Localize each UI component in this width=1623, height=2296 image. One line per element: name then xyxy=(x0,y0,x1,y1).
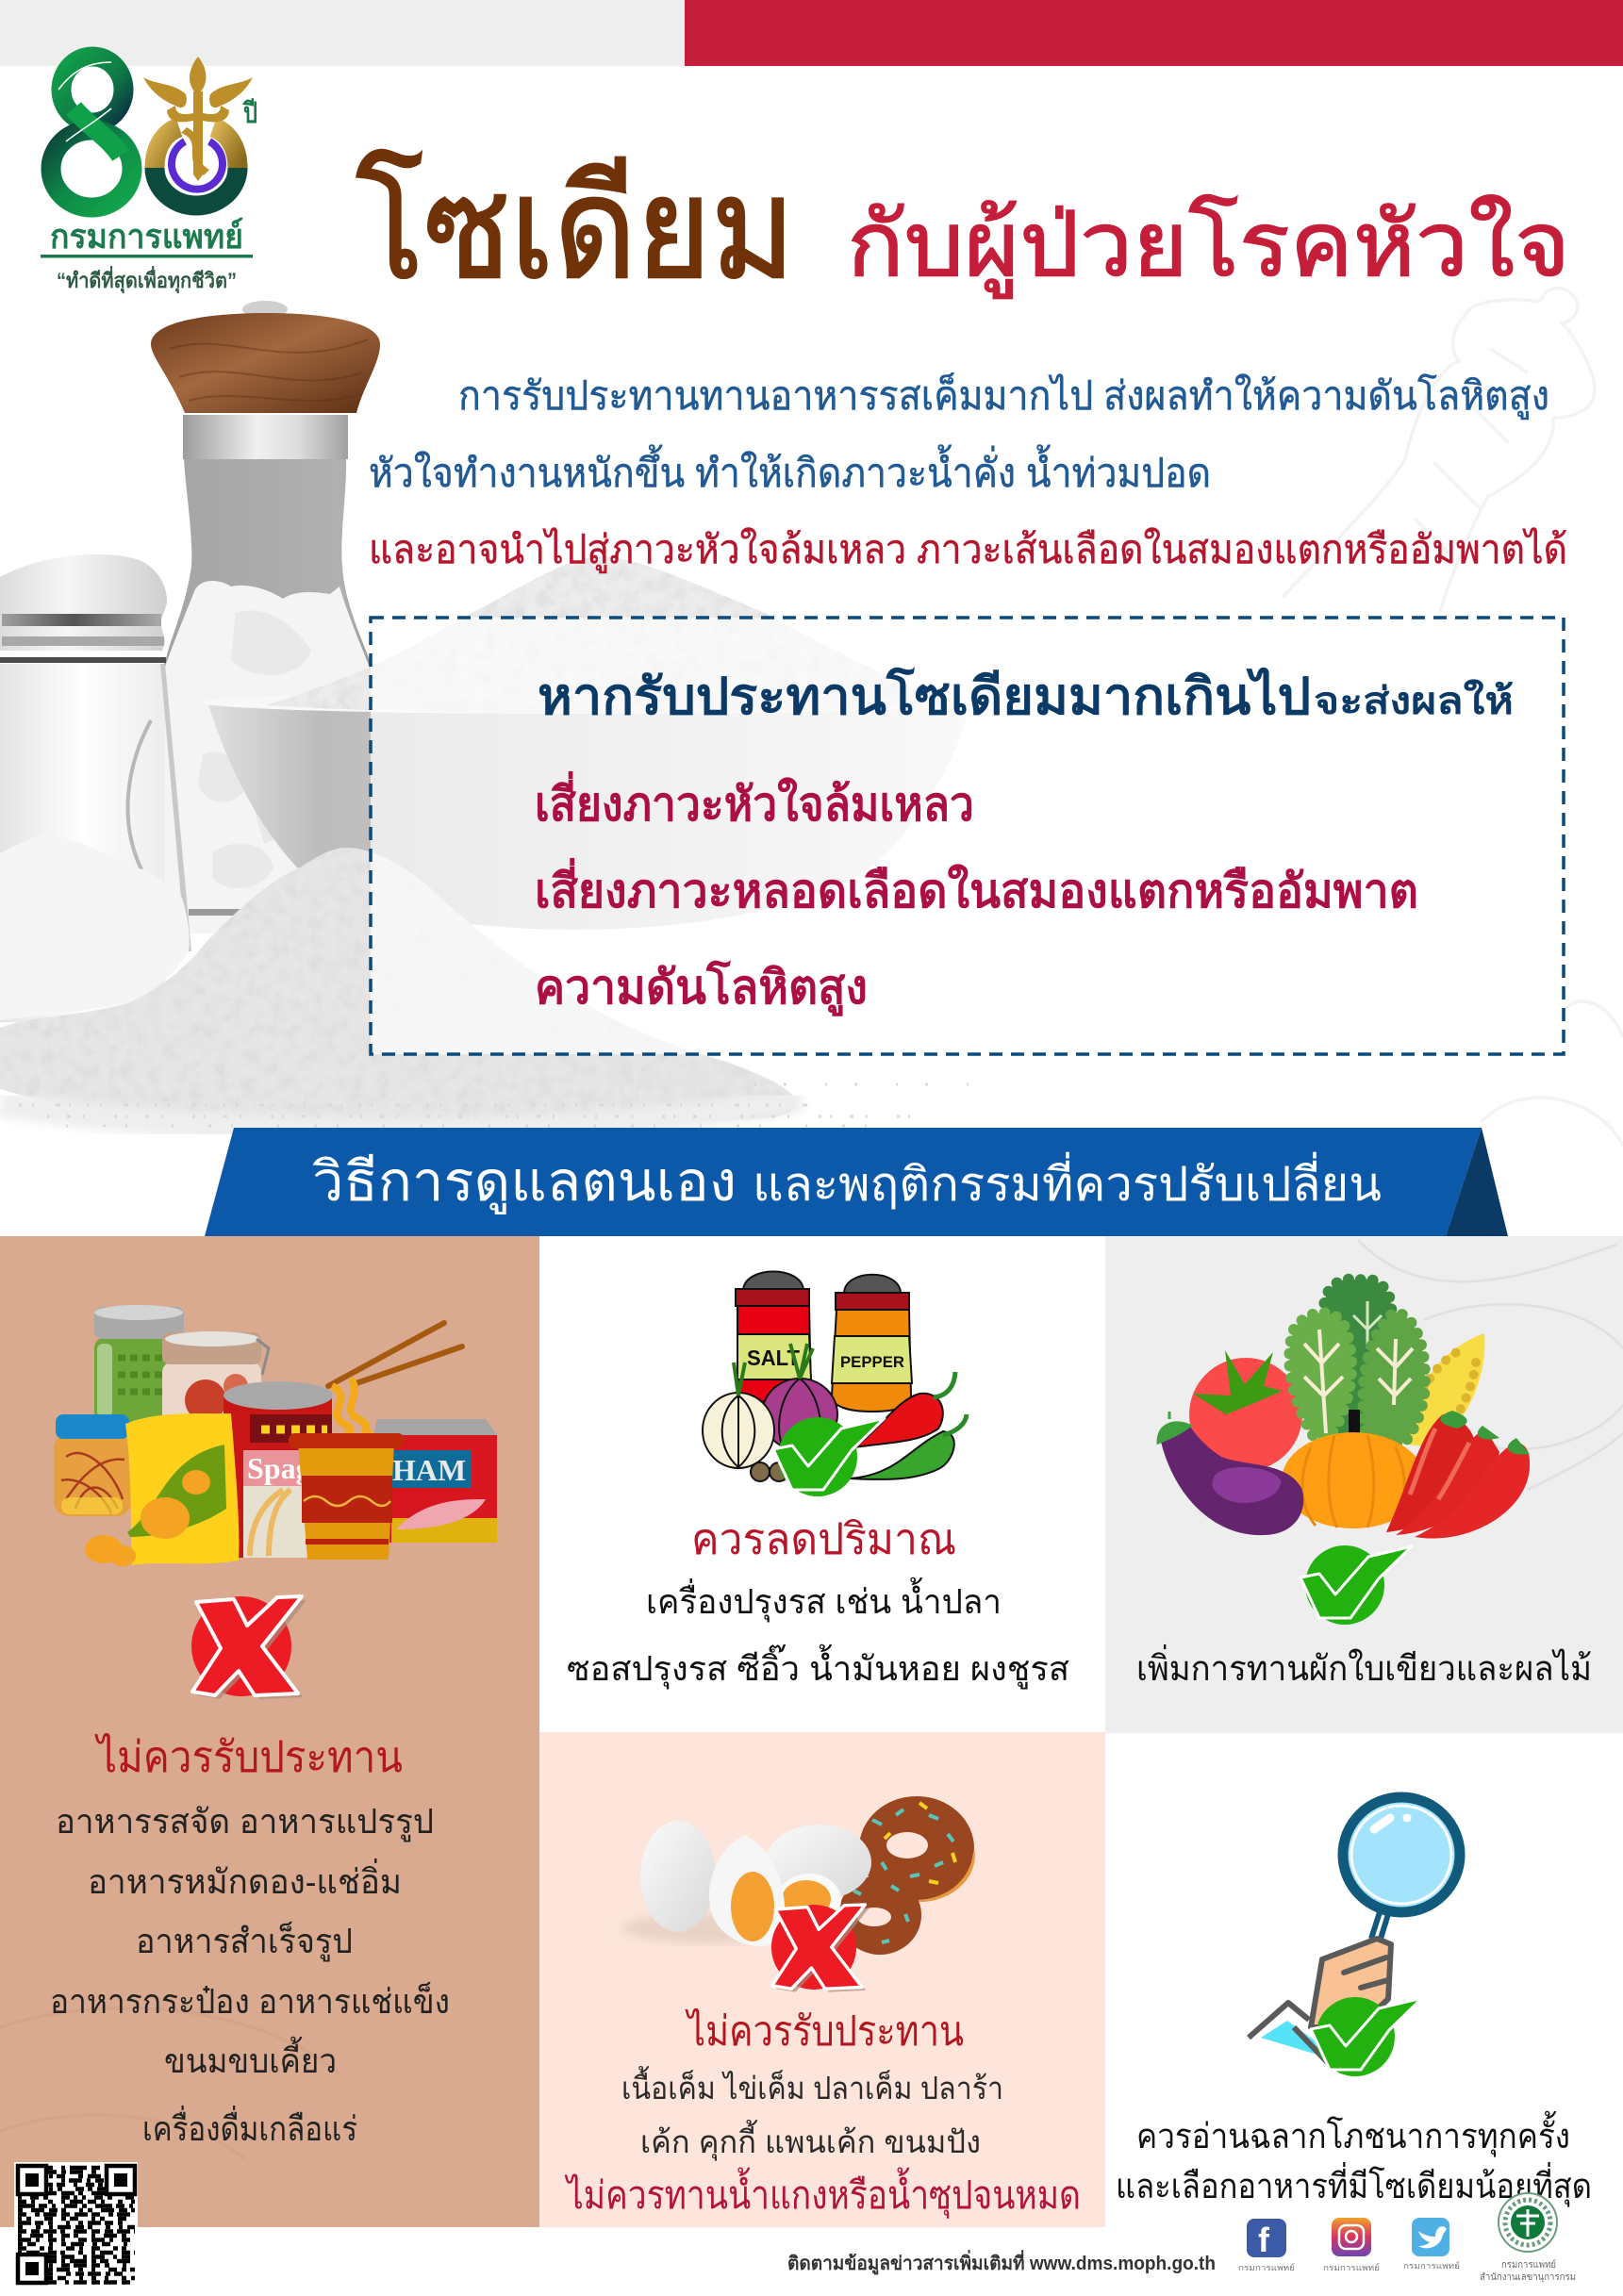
logo year: ปี xyxy=(242,98,257,129)
list of foods: เครื่องดื่มเกลือแร่ xyxy=(142,2106,357,2148)
green chili xyxy=(849,1431,954,1479)
salt shaker xyxy=(0,554,191,1022)
icon: green check xyxy=(1311,1997,1422,2076)
salt shaker xyxy=(736,1271,811,1405)
list of foods: ขนมขบเคี้ยว xyxy=(164,2036,337,2080)
logo name: กรมการแพทย์ xyxy=(50,217,243,256)
banner subheading: และพฤติกรรมที่ควรปรับเปลี่ยน xyxy=(753,1152,1382,1211)
bowl xyxy=(201,556,969,930)
red chili xyxy=(853,1394,943,1447)
top bar red xyxy=(685,0,1623,66)
icon: green check xyxy=(773,1417,885,1496)
seasoning list: ซอสปรุงรส ซีอิ๊ว น้ำมันหอย ผงชูรส xyxy=(567,1644,1069,1690)
footer text: ติดตามข้อมูลข่าวสารเพิ่มเติมที่ www.dms.moph.go.th xyxy=(787,2249,1216,2276)
ham can xyxy=(373,1419,497,1543)
small salt pile xyxy=(0,835,190,1020)
noodle cup xyxy=(289,1433,405,1560)
icon: ministry of public health seal xyxy=(1480,2193,1576,2283)
numeral 0 xyxy=(155,127,238,206)
grinder bottle xyxy=(125,301,396,933)
small orange jar xyxy=(54,1414,131,1516)
top bar grey xyxy=(0,0,685,66)
title: sodium: โซเดียม xyxy=(356,149,795,307)
seasoning list xyxy=(567,1577,1069,1690)
icon: red x mark xyxy=(771,1905,869,1992)
risk 3: ความดันโลหิตสูง xyxy=(535,959,868,1016)
ham can: HAM xyxy=(392,1453,466,1487)
title xyxy=(356,149,1570,307)
icon: red x xyxy=(191,1596,306,1699)
list of foods xyxy=(50,1802,450,2148)
warning about soup: ไม่ควรทานน้ำแกงหรือน้ำซุปจนหมด xyxy=(564,2167,1081,2219)
qr code xyxy=(14,2162,138,2287)
green jar xyxy=(94,1305,184,1424)
icon: green check xyxy=(1300,1545,1412,1625)
half egg xyxy=(709,1835,785,1946)
panel heading suffix: จะส่งผลให้ xyxy=(1314,679,1514,722)
icon: facebook: f xyxy=(1258,2221,1270,2259)
icon: facebook: กรมการแพทย์ xyxy=(1238,2262,1295,2272)
back greens xyxy=(1324,1280,1396,1433)
illustration: salted eggs and donuts xyxy=(622,1796,975,1955)
small donut xyxy=(838,1875,921,1955)
eggplant xyxy=(1158,1412,1303,1535)
risk 1: เสี่ยงภาวะหัวใจล้มเหลว xyxy=(535,771,974,831)
panel: reduce seasonings xyxy=(539,1236,1105,1732)
panel heading: ไม่ควรรับประทาน xyxy=(685,2007,964,2055)
decorative food line art top right xyxy=(1283,288,1623,1146)
pickle jar xyxy=(162,1331,269,1429)
footer contact xyxy=(787,2193,1576,2283)
can of spaghetti: Spag xyxy=(247,1451,311,1485)
salty food list: เค้ก คุกกี้ แพนเค้ก ขนมปัง xyxy=(640,2120,981,2161)
panel: read nutrition labels xyxy=(1116,1797,1592,2207)
panel: eat more vegetables and fruit xyxy=(1105,1236,1623,1733)
title: with heart patients: กับผู้ป่วยโรคหัวใจ xyxy=(847,195,1570,299)
caduceus xyxy=(143,57,253,181)
intro paragraph: และอาจนำไปสู่ภาวะหัวใจล้มเหลว ภาวะเส้นเลือดในสมองแตกหรืออัมพาตได้ xyxy=(369,527,1567,573)
left leaf xyxy=(1289,1313,1351,1438)
panel heading: ควรลดปริมาณ xyxy=(691,1514,956,1563)
salt illustration xyxy=(0,301,971,1131)
illustration: hand with magnifying glass xyxy=(1249,1797,1460,2070)
seasoning list: เครื่องปรุงรส เช่น น้ำปลา xyxy=(646,1577,1002,1623)
numeral 8 xyxy=(51,57,132,207)
risk 2: เสี่ยงภาวะหลอดเลือดในสมองแตกหรืออัมพาต xyxy=(535,858,1418,917)
salty food list xyxy=(621,2066,1003,2161)
can of spaghetti xyxy=(224,1381,333,1558)
peppercorns xyxy=(751,1462,770,1481)
panel heading: ไม่ควรรับประทาน xyxy=(93,1732,403,1781)
cut egg piece xyxy=(777,1874,841,1926)
icon: facebook xyxy=(1238,2219,1295,2272)
purple ring xyxy=(172,141,223,190)
panel heading: หากรับประทานโซเดียมมากเกินไป xyxy=(538,667,1311,725)
panel text xyxy=(1116,2110,1592,2207)
panel text: เพิ่มการทานผักใบเขียวและผลไม้ xyxy=(1136,1644,1592,1688)
intro paragraph xyxy=(369,372,1567,573)
logo slogan: “ทำดีที่สุดเพื่อทุกชีวิต” xyxy=(57,265,237,294)
icon: instagram: กรมการแพทย์ xyxy=(1323,2262,1380,2272)
pumpkin xyxy=(1282,1410,1425,1528)
corn xyxy=(1408,1333,1484,1447)
purple onion xyxy=(762,1344,837,1450)
icon: ministry of public health seal: สำนักงานเลขานุการกรม xyxy=(1480,2272,1576,2283)
list of foods: อาหารกระป๋อง อาหารแช่แข็ง xyxy=(50,1980,450,2021)
large salt pile xyxy=(0,848,971,1131)
illustration: vegetables xyxy=(1158,1280,1530,1539)
white onion xyxy=(703,1363,774,1468)
salt shaker: SALT xyxy=(747,1346,800,1370)
panel: effects of too much sodium xyxy=(371,618,1564,1054)
icon: instagram xyxy=(1323,2218,1380,2272)
icon: twitter: กรมการแพทย์ xyxy=(1403,2260,1460,2271)
illustration: salt and pepper with vegetables xyxy=(703,1271,967,1481)
pepper shaker: PEPPER xyxy=(840,1353,904,1371)
list of foods: อาหารหมักดอง-แช่อิ่ม xyxy=(88,1858,402,1901)
list of foods: อาหารสำเร็จรูป xyxy=(136,1920,353,1962)
yellow snack bag xyxy=(85,1413,239,1566)
logo: department of medical services 80 years xyxy=(41,57,257,294)
icon: twitter xyxy=(1403,2218,1460,2271)
banner xyxy=(205,1128,1508,1236)
list of foods: อาหารรสจัด อาหารแปรรูป xyxy=(56,1802,434,1842)
chopsticks xyxy=(328,1323,462,1386)
left egg xyxy=(640,1821,716,1932)
panel: salty foods and sweets to avoid xyxy=(539,1732,1105,2227)
red peppers xyxy=(1386,1411,1530,1539)
panel: processed foods to avoid xyxy=(0,1236,539,2227)
panel text: ควรอ่านฉลากโภชนาการทุกครั้ง xyxy=(1136,2110,1570,2157)
banner heading: วิธีการดูแลตนเอง xyxy=(312,1151,737,1214)
right leaf xyxy=(1363,1313,1425,1443)
illustration: canned and packaged foods xyxy=(54,1305,497,1566)
large donut xyxy=(859,1796,975,1902)
intro paragraph: การรับประทานทานอาหารรสเค็มมากไป ส่งผลทำให้ความดันโลหิตสูง xyxy=(458,372,1549,420)
pepper shaker xyxy=(832,1275,912,1412)
back egg xyxy=(766,1825,871,1900)
tomato xyxy=(1189,1358,1302,1471)
intro paragraph: หัวใจทำงานหนักขึ้น ทำให้เกิดภาวะน้ำคั่ง น้ำท่วมปอด xyxy=(369,444,1211,495)
scattered salt grains xyxy=(19,1084,971,1126)
icon: ministry of public health seal: กรมการแพทย์ xyxy=(1501,2259,1556,2271)
salty food list: เนื้อเค็ม ไข่เค็ม ปลาเค็ม ปลาร้า xyxy=(621,2066,1003,2106)
noodles xyxy=(332,1379,373,1439)
